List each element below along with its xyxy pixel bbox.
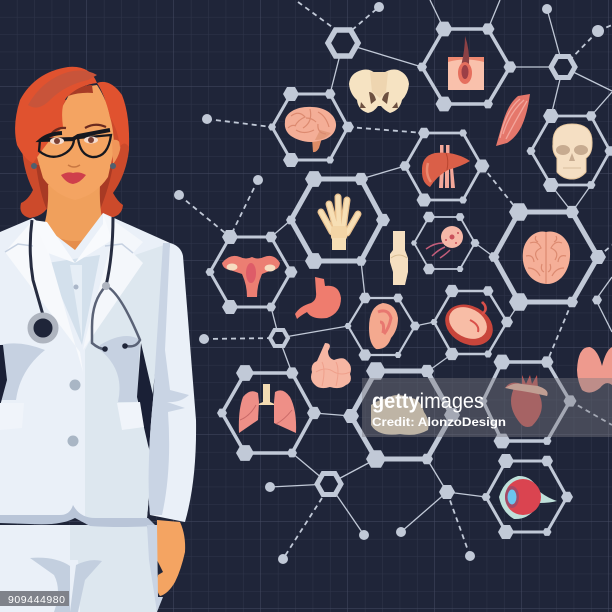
end dots: [174, 2, 604, 564]
watermark credit text: Credit: AlonzoDesign: [372, 415, 506, 429]
lapels and collar: [5, 220, 83, 372]
hexagon: lungs: [217, 365, 321, 461]
nose: [68, 165, 80, 167]
image id badge: [0, 591, 69, 606]
hexagon: liver: [400, 128, 490, 207]
icon: side brain: [285, 107, 336, 152]
icon: heart: [505, 375, 548, 427]
stethoscope: [30, 217, 140, 352]
icon: skin with hair follicle: [448, 36, 484, 90]
icon: top brain: [523, 232, 570, 284]
icon: thyroid: [577, 347, 612, 393]
pants side shade: [147, 525, 163, 612]
icon: lungs: [239, 384, 296, 433]
icon: uterus: [222, 256, 280, 297]
hexagon: ear: [344, 293, 420, 361]
sleeve: [149, 243, 196, 522]
icon: cell: [426, 226, 463, 258]
icon: eye: [499, 476, 557, 519]
hand: [157, 520, 185, 596]
body gaps: [0, 343, 153, 463]
hexagon: center: [343, 362, 460, 468]
icon: tan organ in center hexagon: [371, 395, 428, 435]
neck: [45, 185, 103, 263]
icon: intestines: [311, 343, 351, 388]
image id badge: 909444980: [8, 594, 65, 606]
icon: pelvis: [349, 70, 409, 113]
icon: knee: [390, 231, 408, 285]
icon: liver: [422, 145, 470, 188]
icon: muscle: [496, 94, 530, 146]
hexagon: eye: [482, 454, 573, 539]
hexagon: skin: [417, 22, 516, 111]
hair back: [20, 100, 129, 218]
eyes: [50, 138, 64, 144]
watermark logo text: gettyimages: [372, 390, 484, 413]
woman doctor illustration: [0, 67, 196, 612]
buttons: [70, 380, 80, 390]
network connector lines: [179, 0, 612, 559]
earrings: [31, 163, 37, 169]
hexagon: cell: [411, 212, 480, 274]
icon: hand bones: [321, 197, 358, 250]
hexagon: skull: [526, 109, 612, 192]
hair front: [15, 67, 97, 163]
watermark band: [362, 378, 612, 437]
pants: [0, 525, 157, 612]
junction hexagon nodes: [270, 30, 602, 499]
icon: ear: [369, 303, 398, 349]
shirt: [47, 255, 100, 345]
coat hem shadow: [0, 505, 156, 527]
icon: stomach: [295, 277, 341, 319]
ears: [112, 140, 120, 164]
hexagon: hand: [286, 171, 390, 269]
hexagon: side brain: [268, 87, 354, 167]
hexagon: embryo: [430, 285, 513, 360]
face: [37, 85, 114, 200]
pockets: [0, 402, 144, 430]
icon: skull: [553, 124, 592, 179]
hexagon: top brain: [488, 203, 606, 311]
icon: embryo: [438, 296, 500, 354]
hexagon: heart: [478, 355, 576, 448]
hexagon: uterus: [206, 230, 298, 314]
coat torso: [0, 213, 170, 518]
glasses: [39, 130, 111, 157]
lips: [61, 172, 86, 184]
eyebrows: [52, 125, 106, 133]
